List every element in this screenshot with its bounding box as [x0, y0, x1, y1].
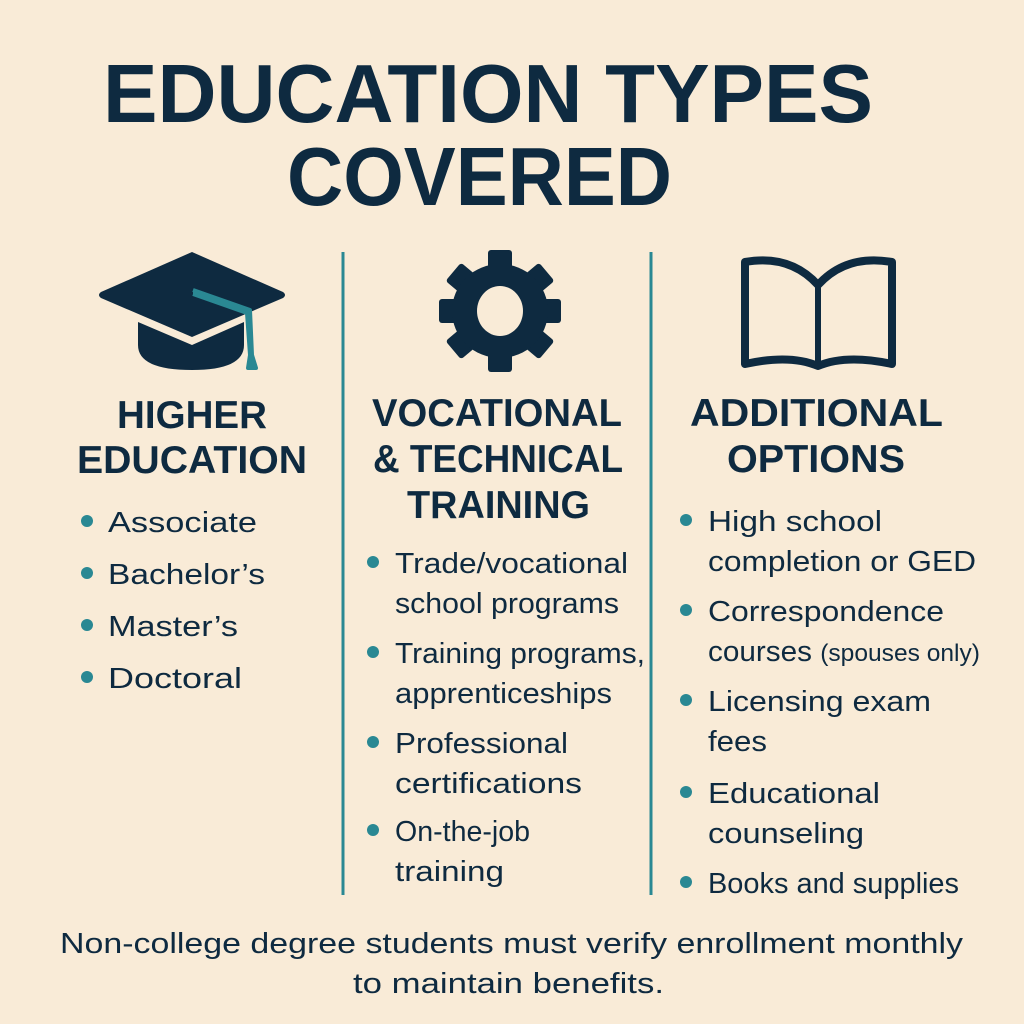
- list: vocational items: On-the-job: [395, 816, 530, 848]
- list: vocational items: training: [395, 856, 504, 888]
- heading: higher education: HIGHER: [117, 394, 267, 437]
- list: additional items: completion or GED: [708, 546, 976, 578]
- list: additional items: counseling: [708, 818, 864, 850]
- column: additional options: [680, 392, 980, 900]
- list: degrees: Associate: [108, 507, 257, 539]
- heading: vocational & technical training: [372, 392, 623, 527]
- heading: higher education: [77, 394, 307, 482]
- list: vocational items: Training programs,: [395, 638, 645, 670]
- title: EDUCATION TYPES: [103, 47, 873, 140]
- heading: additional options: OPTIONS: [727, 438, 905, 481]
- list: additional items: fees: [708, 726, 767, 758]
- list: degrees: [81, 507, 265, 695]
- list: additional items: Books and supplies: [708, 868, 959, 900]
- icon: graduation cap: [99, 252, 285, 370]
- heading: additional options: ADDITIONAL: [690, 392, 943, 435]
- title: [103, 47, 873, 223]
- icon: open book: [745, 260, 892, 366]
- list: additional items: courses (spouses only): [708, 636, 980, 668]
- heading: vocational & technical training: VOCATIONAL: [372, 392, 622, 435]
- list: degrees: Bachelor’s: [108, 559, 265, 591]
- list: degrees: Master’s: [108, 611, 238, 643]
- list: additional items: [680, 506, 980, 900]
- column: higher education: [77, 394, 307, 695]
- title: COVERED: [287, 130, 672, 223]
- footer note: [60, 928, 964, 1000]
- list: vocational items: Trade/vocational: [395, 548, 628, 580]
- list: additional items: High school: [708, 506, 882, 538]
- column: vocational: [367, 392, 645, 888]
- list: vocational items: [367, 548, 645, 888]
- list: additional items: Correspondence: [708, 596, 944, 628]
- heading: additional options: [690, 392, 943, 481]
- list: additional items: Licensing exam: [708, 686, 931, 718]
- heading: vocational & technical training: TRAINING: [407, 484, 590, 527]
- list: vocational items: apprenticeships: [395, 678, 612, 710]
- heading: vocational & technical training: & TECHNICAL: [373, 438, 623, 481]
- footer note: Non-college degree students must verify enrollment monthly: [60, 928, 964, 960]
- heading: higher education: EDUCATION: [77, 439, 307, 482]
- list: vocational items: certifications: [395, 768, 582, 800]
- footer note: to maintain benefits.: [353, 968, 664, 1000]
- list: degrees: Doctoral: [108, 663, 242, 695]
- icon: gear: [439, 250, 561, 372]
- list: vocational items: school programs: [395, 588, 619, 620]
- list: additional items: Educational: [708, 778, 880, 810]
- list: vocational items: Professional: [395, 728, 568, 760]
